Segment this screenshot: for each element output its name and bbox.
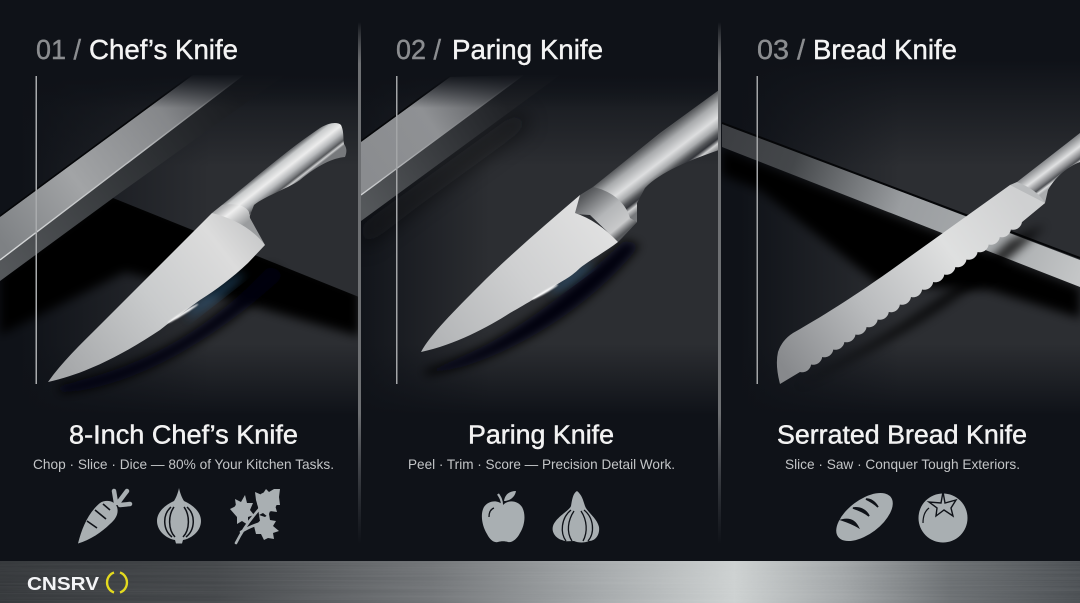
heading: 01 / Chef's Knife [36,38,237,60]
subtitle: Serrated Bread Knife [777,422,1027,450]
steel bar [0,78,240,281]
panel: chef's knife [0,38,358,544]
shadow of steel bar [722,148,1080,318]
icon: apple [482,491,524,542]
divider between panels 1 and 2 [358,22,361,544]
steel bar [361,77,519,221]
icon: onion [157,488,201,544]
heading: 03 / Bread Knife: 03 / [757,34,805,65]
icon: tomato [918,492,968,542]
blade shadow and blue glint [425,240,640,375]
heading: 01 / Chef's Knife: Chef’s Knife [89,34,238,65]
chef's knife [48,123,346,382]
panel: bread knife [721,38,1080,542]
icon: bread [836,493,893,541]
steel bar [722,123,1080,287]
subtitle: 8-Inch Chef’s Knife [69,422,298,450]
icon: carrot [78,491,130,544]
heading: 02 / Paring Knife: 02 / [396,34,441,65]
vertical accent line [396,76,398,384]
description: Slice · Saw · Conquer Tough Exteriors. [785,456,1020,472]
subtitle: Paring Knife [468,422,614,450]
icon: parsley [230,489,280,543]
panel: paring knife [361,38,718,542]
divider between panels 2 and 3 [718,22,721,544]
vertical accent line [756,76,758,384]
heading: 01 / Chef's Knife: 01 / [36,34,81,65]
blade shadow [844,226,1040,362]
heading: 03 / Bread Knife [758,38,956,60]
logo: CNSRV [27,572,127,594]
description: Peel · Trim · Score — Precision Detail Work. [408,456,675,472]
vertical accent line [36,76,37,384]
description: Chop · Slice · Dice — 80% of Your Kitchen Tasks. [33,456,334,472]
bread knife [777,133,1080,384]
icon: garlic [553,491,599,542]
shadow of steel bar [0,190,359,336]
footer: brushed steel band [0,561,1080,603]
heading: 02 / Paring Knife [396,38,602,66]
work surface [74,99,358,396]
blade shadow and blue glint [60,265,285,393]
heading: 02 / Paring Knife: Paring Knife [452,34,603,65]
heading: 03 / Bread Knife: Bread Knife [813,34,957,65]
work surface [386,98,718,396]
logo: CNSRV: CNSRV [27,573,100,594]
top fade over bar [152,74,284,106]
paring knife [421,90,719,352]
work surface [784,90,1080,396]
shadow of steel bar [382,115,526,231]
top fade over bar [412,74,560,106]
